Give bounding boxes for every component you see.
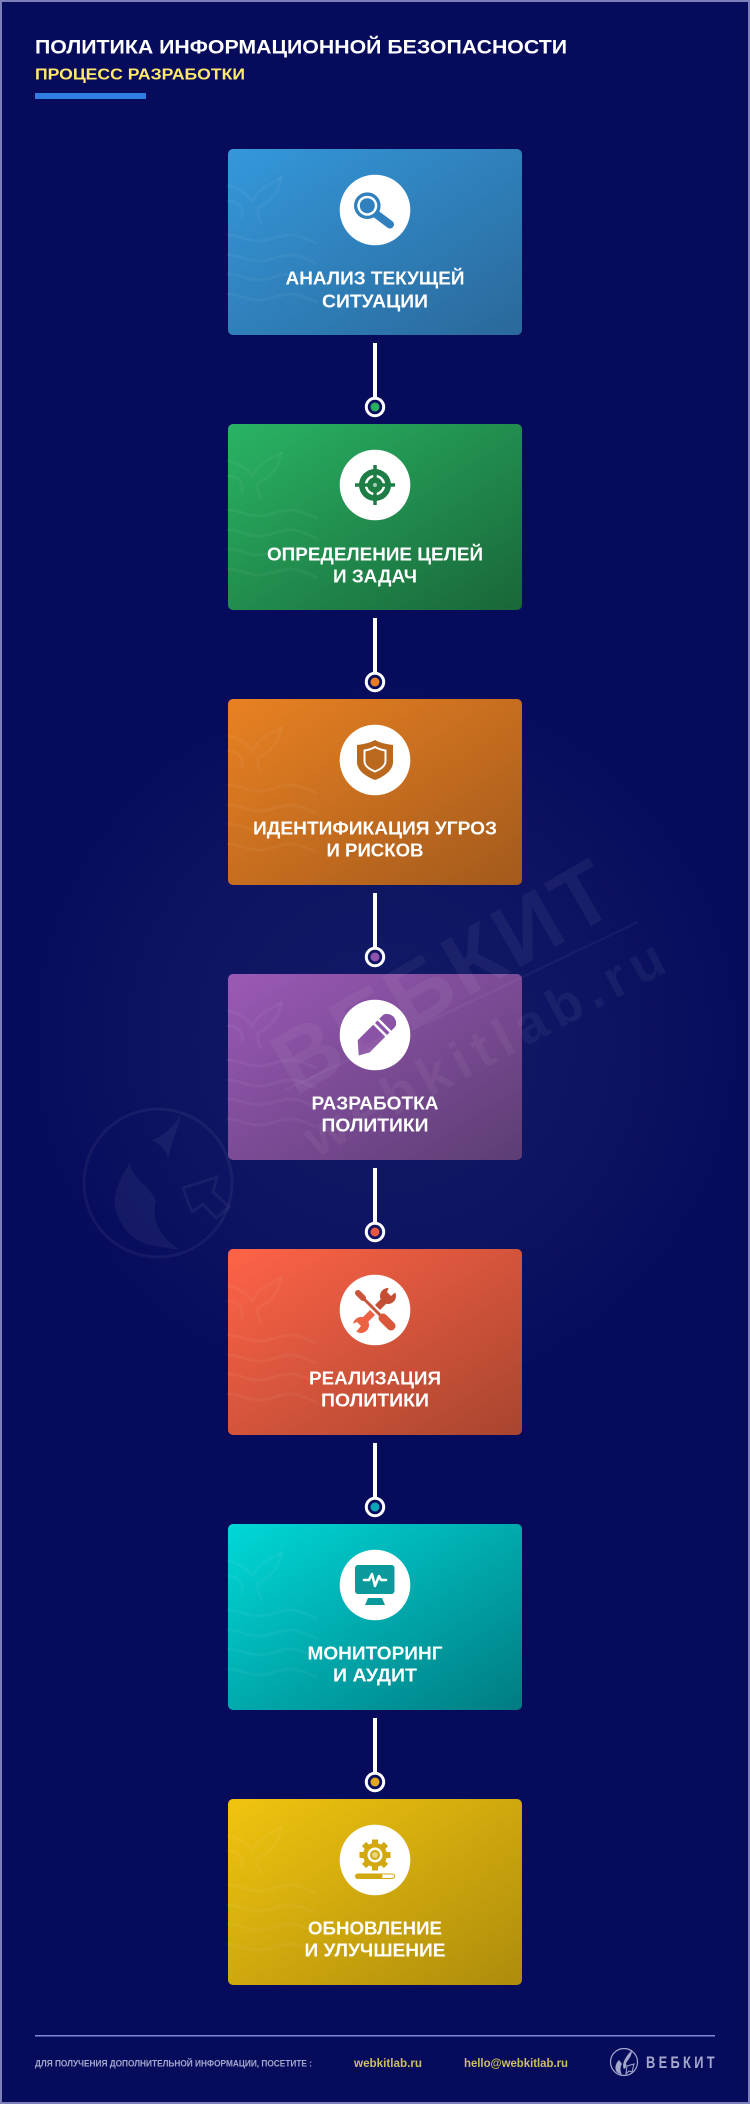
card background: [228, 424, 522, 610]
step label: И РИСКОВ: [326, 840, 424, 860]
step label: И ЗАДАЧ: [333, 566, 417, 586]
panel: step 4 policy development: [228, 974, 522, 1160]
email link: hello@webkitlab.ru: [464, 2058, 568, 2070]
footer logo: [610, 2048, 715, 2076]
step label: [304, 1918, 446, 1960]
header: [35, 36, 567, 99]
step label: [312, 1092, 438, 1136]
panel: step 5 implementation: [228, 1249, 522, 1435]
watermark logo: [84, 1109, 232, 1257]
panel: step 6 monitoring: [228, 1524, 522, 1710]
connector 3: [366, 893, 384, 966]
step label: И УЛУЧШЕНИЕ: [304, 1940, 446, 1960]
step label: [267, 544, 483, 586]
icon: magnifier: [340, 175, 410, 245]
footer: [35, 2036, 715, 2076]
icon: gear with progress bar: [340, 1825, 410, 1895]
icon: pencil: [340, 1000, 410, 1070]
watermark url: webkitlab.ru: [293, 928, 675, 1169]
panel: step 3 threats: [228, 699, 522, 885]
card background: [228, 1524, 522, 1710]
step label: [286, 268, 464, 312]
watermark: [84, 840, 675, 1257]
step label: ОПРЕДЕЛЕНИЕ ЦЕЛЕЙ: [267, 544, 483, 564]
footer divider: [35, 2035, 715, 2037]
panel: step 2 goals: [228, 424, 522, 610]
connector 5: [366, 1443, 384, 1516]
footer note: ДЛЯ ПОЛУЧЕНИЯ ДОПОЛНИТЕЛЬНОЙ ИНФОРМАЦИИ, ПОСЕТИТЕ :: [35, 2058, 312, 2070]
card background: [228, 149, 522, 335]
card background: [228, 1799, 522, 1985]
logo wordmark: ВЕБКИТ: [646, 2055, 715, 2072]
card background: [228, 1249, 522, 1435]
connector 4: [366, 1168, 384, 1241]
watermark name: ВЕБКИТ: [255, 840, 629, 1113]
panel: step 1 analysis: [228, 149, 522, 335]
icon: shield: [340, 725, 410, 795]
connector 1: [366, 343, 384, 416]
icon: monitor: [340, 1550, 410, 1620]
step label: ПОЛИТИКИ: [321, 1390, 429, 1410]
step label: ПОЛИТИКИ: [322, 1114, 428, 1136]
step label: [309, 1368, 441, 1410]
step label: ОБНОВЛЕНИЕ: [308, 1918, 442, 1938]
step label: РЕАЛИЗАЦИЯ: [309, 1368, 441, 1388]
step label: МОНИТОРИНГ: [308, 1642, 443, 1664]
icon: tools: [340, 1275, 410, 1345]
step label: [253, 818, 497, 860]
subtitle: ПРОЦЕСС РАЗРАБОТКИ: [35, 66, 245, 84]
title: ПОЛИТИКА ИНФОРМАЦИОННОЙ БЕЗОПАСНОСТИ: [35, 36, 567, 58]
panel: step 7 improvement: [228, 1799, 522, 1985]
step label: РАЗРАБОТКА: [312, 1092, 438, 1114]
step label: [308, 1642, 443, 1686]
step label: ИДЕНТИФИКАЦИЯ УГРОЗ: [253, 818, 497, 838]
connector 6: [366, 1718, 384, 1791]
step label: АНАЛИЗ ТЕКУЩЕЙ: [286, 268, 464, 288]
watermark divider: [285, 922, 638, 1090]
website link: webkitlab.ru: [353, 2058, 422, 2070]
connector 2: [366, 618, 384, 691]
step label: СИТУАЦИИ: [322, 290, 428, 312]
icon: target: [340, 450, 410, 520]
card background: [228, 974, 522, 1160]
accent bar: [35, 93, 146, 99]
card background: [228, 699, 522, 885]
step label: И АУДИТ: [333, 1664, 418, 1686]
